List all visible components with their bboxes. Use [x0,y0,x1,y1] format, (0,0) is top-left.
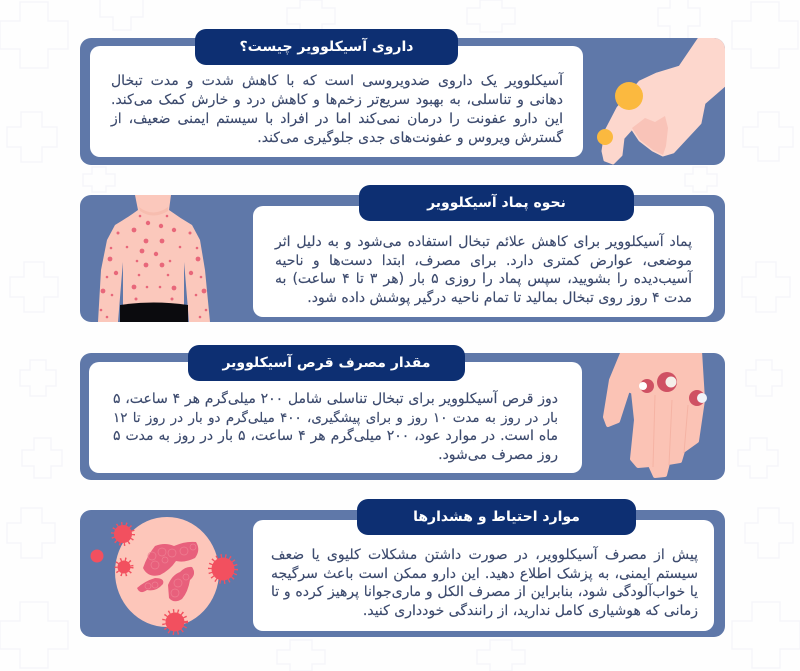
white text card [253,206,714,317]
heading: نحوه پماد آسیکلوویر [427,195,566,211]
white text card [253,520,714,631]
body text: پیش از مصرف آسیکلوویر، در صورت داشتن مشکلات کلیوی یا ضعف [271,547,698,563]
white text card [90,46,583,157]
body text: آسیب‌دیده را بشویید، سپس پماد را روزی ۵ بار (هر ۳ تا ۴ ساعت) به [275,271,692,287]
heading: داروی آسیکلوویر چیست؟ [240,39,413,55]
body text: مدت ۴ روز روی تبخال بمالید تا تمام ناحیه درگیر پوشش داده شود. [307,290,692,306]
icon: skin lesions and viruses [90,517,236,633]
panel background with body illustration [80,195,725,322]
body text: روز مصرف می‌شود. [438,446,558,462]
heading: موارد احتیاط و هشدارها [413,509,580,525]
body text: پماد آسیکلوویر برای کاهش علائم تبخال استفاده می‌شود و به دلیل اثر [275,234,692,250]
body text: دوز قرص آسیکلوویر برای تبخال تناسلی شامل ۲۰۰ میلی‌گرم هر ۴ ساعت، ۵ [113,391,558,407]
panel background with hand illustration [80,353,725,480]
icon: pointing hand with sores [597,36,727,163]
body text: گسترش ویروس و عفونت‌های جدی جلوگیری می‌کند. [257,130,563,146]
panel: how to use ointment [80,185,725,322]
icon: hand with sores [605,351,707,476]
panel: precautions and warnings [80,499,725,637]
body text: سیستم ایمنی، به پزشک اطلاع دهید. این دارو ممکن است باعث سرگیجه [271,566,698,582]
panel background with skin illustration [80,510,725,637]
heading [195,29,458,65]
panel: what is acyclovir [80,29,725,165]
icon: torso with rash [98,195,210,323]
body text: این دارو عفونت را درمان نمی‌کند اما در افراد با سیستم ایمنی ضعیف، از [111,111,563,127]
body text [271,546,698,619]
body text: بار در روز به مدت ۱۰ روز و برای پیشگیری، ۴۰۰ میلی‌گرم دو بار در روز تا ۱۲ [113,410,558,426]
body text [110,72,564,146]
body text: آسیکلوویر یک داروی ضدویروسی است که با کاهش شدت و مدت تبخال [111,73,563,89]
body text: دهانی و تناسلی، به بهبود سریع‌تر زخم‌ها و کاهش درد و خارش کمک می‌کند. [111,92,563,108]
panel: tablet dosage [80,345,725,480]
body text: زمانی که هوشیاری کامل ندارید، از رانندگی خودداری کنید. [363,602,698,618]
body text: ماه است. در موارد عود، ۲۰۰ میلی‌گرم هر ۴ ساعت، ۵ بار در روز به مدت ۵ [113,428,558,444]
panel background with hand illustration [80,38,725,165]
heading [188,345,465,381]
body text [274,233,693,306]
white text card [89,362,582,473]
heading [357,499,636,535]
body text: یا خواب‌آلودگی شود، بنابراین از مصرف الکل و ماری‌جوانا پرهیز کرده و تا [271,584,698,600]
body text: موضعی، عوارض کمتری دارد. برای مصرف، ابتدا دست‌ها و ناحیه [275,252,692,268]
heading: مقدار مصرف قرص آسیکلوویر [222,355,431,371]
heading [359,185,634,221]
body text [113,390,558,463]
